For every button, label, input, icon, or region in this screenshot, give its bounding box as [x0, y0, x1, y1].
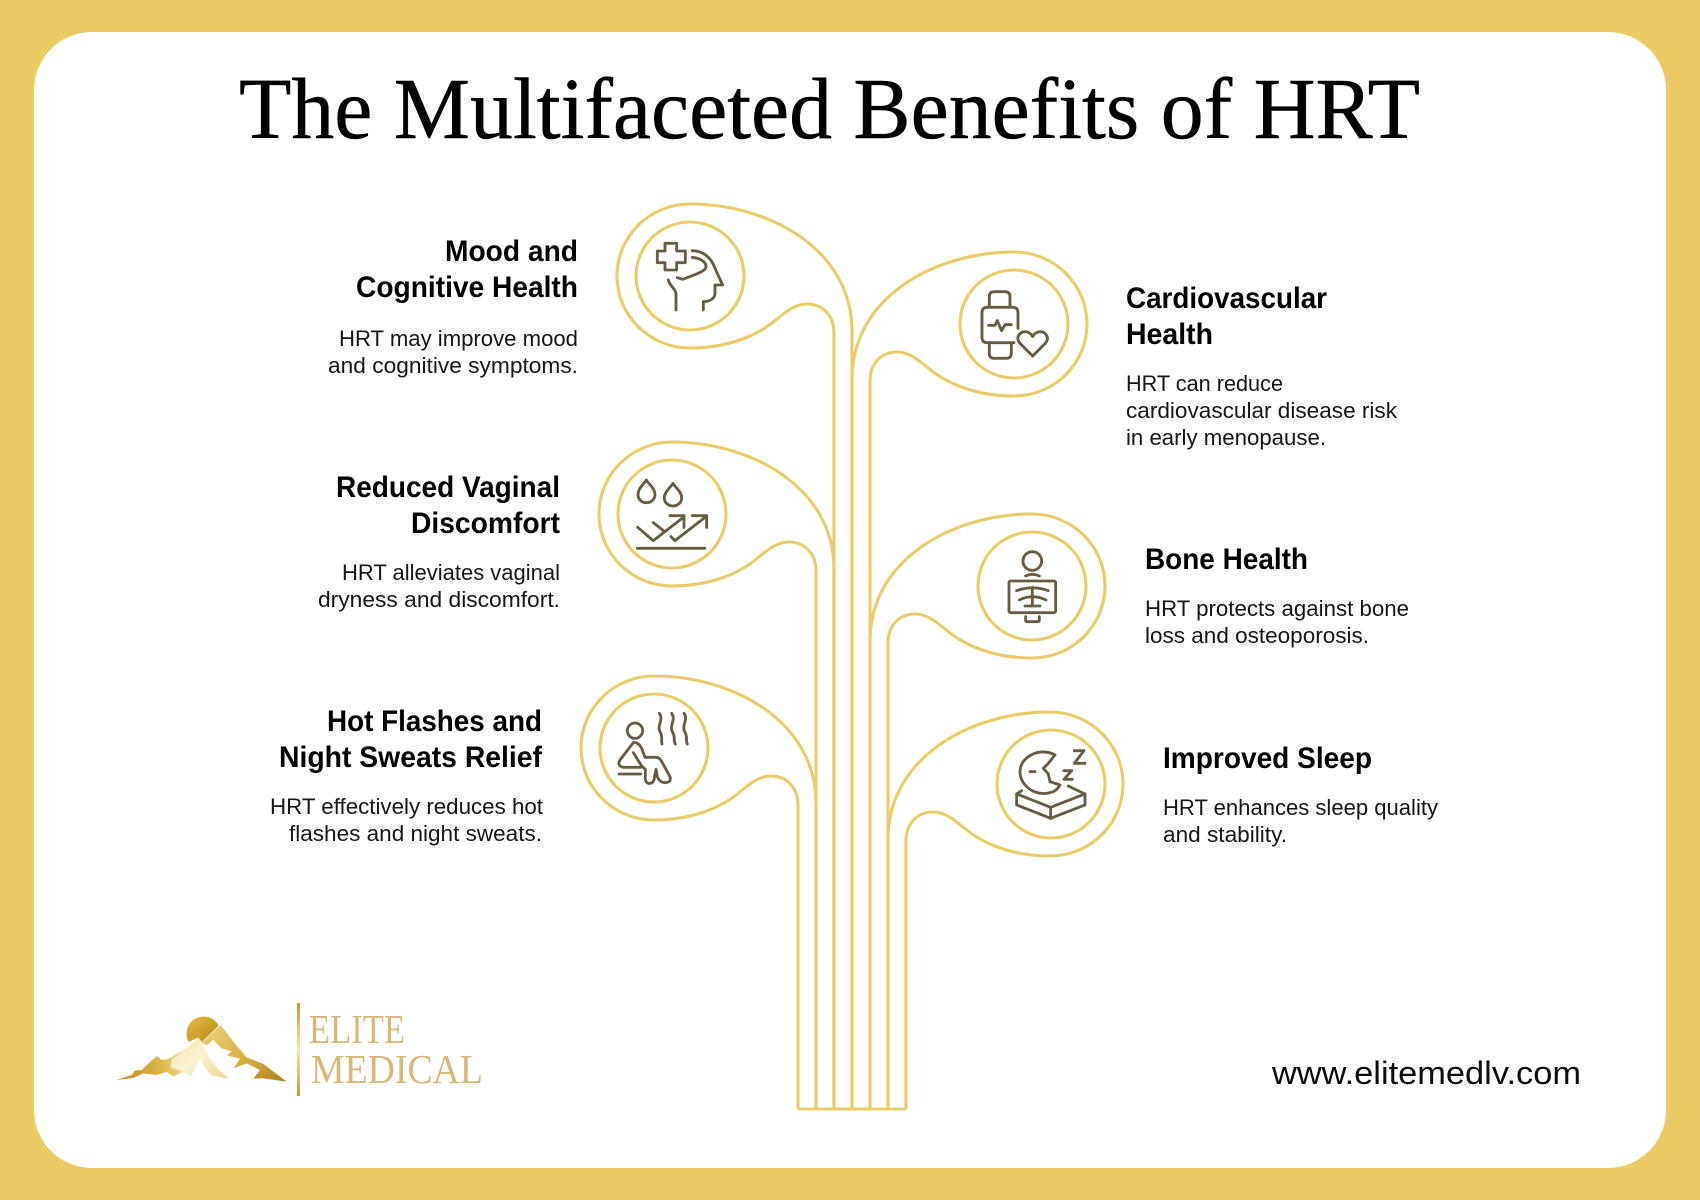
panel: improved sleep — [997, 730, 1438, 847]
description: HRT protects against bone — [1145, 596, 1409, 621]
icon: x-ray scanner — [1009, 552, 1056, 622]
heading — [336, 471, 560, 540]
logo: Elite Medical — [117, 1003, 483, 1096]
description: HRT alleviates vaginal — [342, 560, 560, 585]
icon: head with medical cross — [657, 243, 723, 310]
panel: hot flashes and night sweats relief — [270, 694, 708, 846]
icon ring: sleep — [997, 730, 1105, 838]
icon: smartwatch and heart — [982, 292, 1047, 358]
website url: www.elitemedlv.com — [1271, 1055, 1581, 1091]
description — [1145, 596, 1409, 648]
wordmark — [309, 1006, 483, 1092]
panel: reduced vaginal discomfort — [318, 460, 726, 612]
icon ring: drops — [618, 460, 726, 568]
heading: Bone Health — [1145, 543, 1308, 576]
icon: drops and arrows — [637, 480, 707, 548]
icon ring: head — [636, 222, 744, 330]
icon ring: sauna — [600, 694, 708, 802]
description — [328, 326, 578, 378]
description: loss and osteoporosis. — [1145, 623, 1369, 648]
heading: Improved Sleep — [1163, 742, 1372, 775]
panel: bone health — [978, 532, 1409, 648]
icon: seated person with heat waves — [619, 713, 687, 783]
description: HRT effectively reduces hot — [270, 794, 543, 819]
wordmark: ELITE — [309, 1006, 405, 1052]
description: HRT enhances sleep quality — [1163, 795, 1438, 820]
panel: mood and cognitive health — [328, 222, 744, 378]
heading: Cardiovascular — [1126, 282, 1327, 315]
icon: moon over mattress — [1017, 751, 1085, 818]
heading: Discomfort — [411, 507, 560, 540]
description — [1126, 371, 1398, 450]
description: flashes and night sweats. — [289, 821, 542, 846]
panel: cardiovascular health — [960, 270, 1398, 450]
icon ring: watch — [960, 270, 1068, 378]
heading — [356, 235, 578, 304]
divider — [297, 1003, 300, 1096]
description: cardiovascular disease risk — [1126, 398, 1398, 423]
tree stems and petals — [581, 204, 1123, 1109]
heading: Night Sweats Relief — [279, 741, 543, 774]
heading: Hot Flashes and — [327, 705, 542, 738]
wordmark: MEDICAL — [311, 1046, 483, 1092]
heading: Health — [1126, 318, 1213, 351]
icon ring: x-ray — [978, 532, 1086, 640]
title: The Multifaceted Benefits of HRT — [239, 60, 1420, 157]
description: HRT can reduce — [1126, 371, 1283, 396]
description: and cognitive symptoms. — [328, 353, 578, 378]
heading: Reduced Vaginal — [336, 471, 560, 504]
description: HRT may improve mood — [339, 326, 578, 351]
description — [318, 560, 560, 612]
description: and stability. — [1163, 822, 1287, 847]
description — [1163, 795, 1438, 847]
heading: Mood and — [445, 235, 578, 268]
description: dryness and discomfort. — [318, 587, 560, 612]
description: in early menopause. — [1126, 425, 1326, 450]
icon: mountain and sun — [117, 1017, 287, 1082]
heading — [279, 705, 543, 774]
heading: Cognitive Health — [356, 271, 578, 304]
description — [270, 794, 543, 846]
heading — [1126, 282, 1327, 351]
